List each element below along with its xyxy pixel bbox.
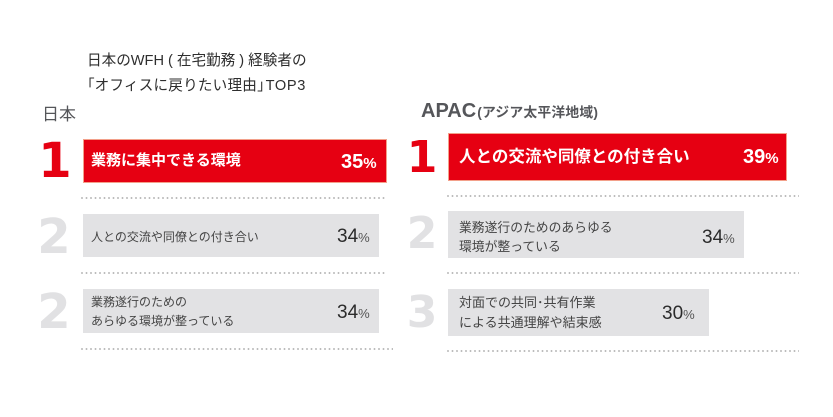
value: 39%: 39%: [743, 146, 779, 168]
label: face-to-face: 対面での共同･共有作業: [459, 295, 596, 310]
rank number 1: 1: [407, 132, 437, 183]
heading: Japan: 日本: [42, 105, 76, 124]
panel: Japan rank 2 second: [37, 284, 379, 340]
label: business environment: [91, 295, 234, 328]
divider dots: [81, 272, 386, 274]
divider dots: [447, 350, 799, 352]
divider dots: [81, 348, 393, 350]
value: 30%: 30%: [662, 303, 695, 324]
panel: APAC rank 3: [407, 287, 709, 338]
label: face-to-face: [459, 295, 602, 330]
divider dots: [81, 197, 386, 199]
rank number 1: 1: [38, 133, 72, 189]
label: business environment: [459, 220, 613, 254]
label: work environment: 業務に集中できる環境: [91, 152, 241, 169]
rank number 2: 2: [37, 209, 71, 265]
bar: human interaction 34%: [83, 214, 379, 257]
title: [80, 52, 307, 94]
panel: Japan rank 2 first: [37, 209, 379, 265]
panel: Japan rank 1: [38, 133, 387, 189]
value: 34%: 34%: [702, 227, 735, 248]
heading: APAC: APAC(アジア太平洋地域): [421, 100, 598, 122]
bar: face-to-face 30%: [448, 289, 709, 336]
label: business environment: 環境が整っている: [459, 239, 561, 254]
label: business environment: あらゆる環境が整っている: [91, 314, 234, 328]
label: human interaction: 人との交流や同僚との付き合い: [91, 230, 259, 244]
bar: human interaction 39%: [448, 133, 787, 181]
value: 34%: 34%: [337, 302, 370, 323]
label: human interaction: 人との交流や同僚との付き合い: [459, 148, 690, 166]
value: 34%: 34%: [337, 226, 370, 247]
divider dots: [447, 272, 799, 274]
rank number 2: 2: [37, 284, 71, 340]
rank number 3: 3: [407, 287, 437, 338]
label: business environment: 業務遂行のための: [91, 295, 187, 309]
panel: APAC rank 2: [407, 208, 744, 259]
label: face-to-face: による共通理解や結束感: [459, 315, 602, 330]
bar: business environment 34%: [83, 289, 379, 333]
panel: APAC rank 1: [407, 132, 787, 183]
value: 35%: 35%: [341, 151, 377, 173]
bar: work environment 35%: [83, 139, 387, 183]
divider dots: [447, 195, 799, 197]
title: 日本のWFH ( 在宅勤務 ) 経験者の: [87, 53, 307, 69]
title: 「オフィスに戻りたい理由」TOP3: [80, 78, 306, 94]
rank number 2: 2: [407, 208, 437, 259]
label: business environment: 業務遂行のためのあらゆる: [459, 220, 613, 235]
bar: business environment 34%: [448, 211, 744, 258]
